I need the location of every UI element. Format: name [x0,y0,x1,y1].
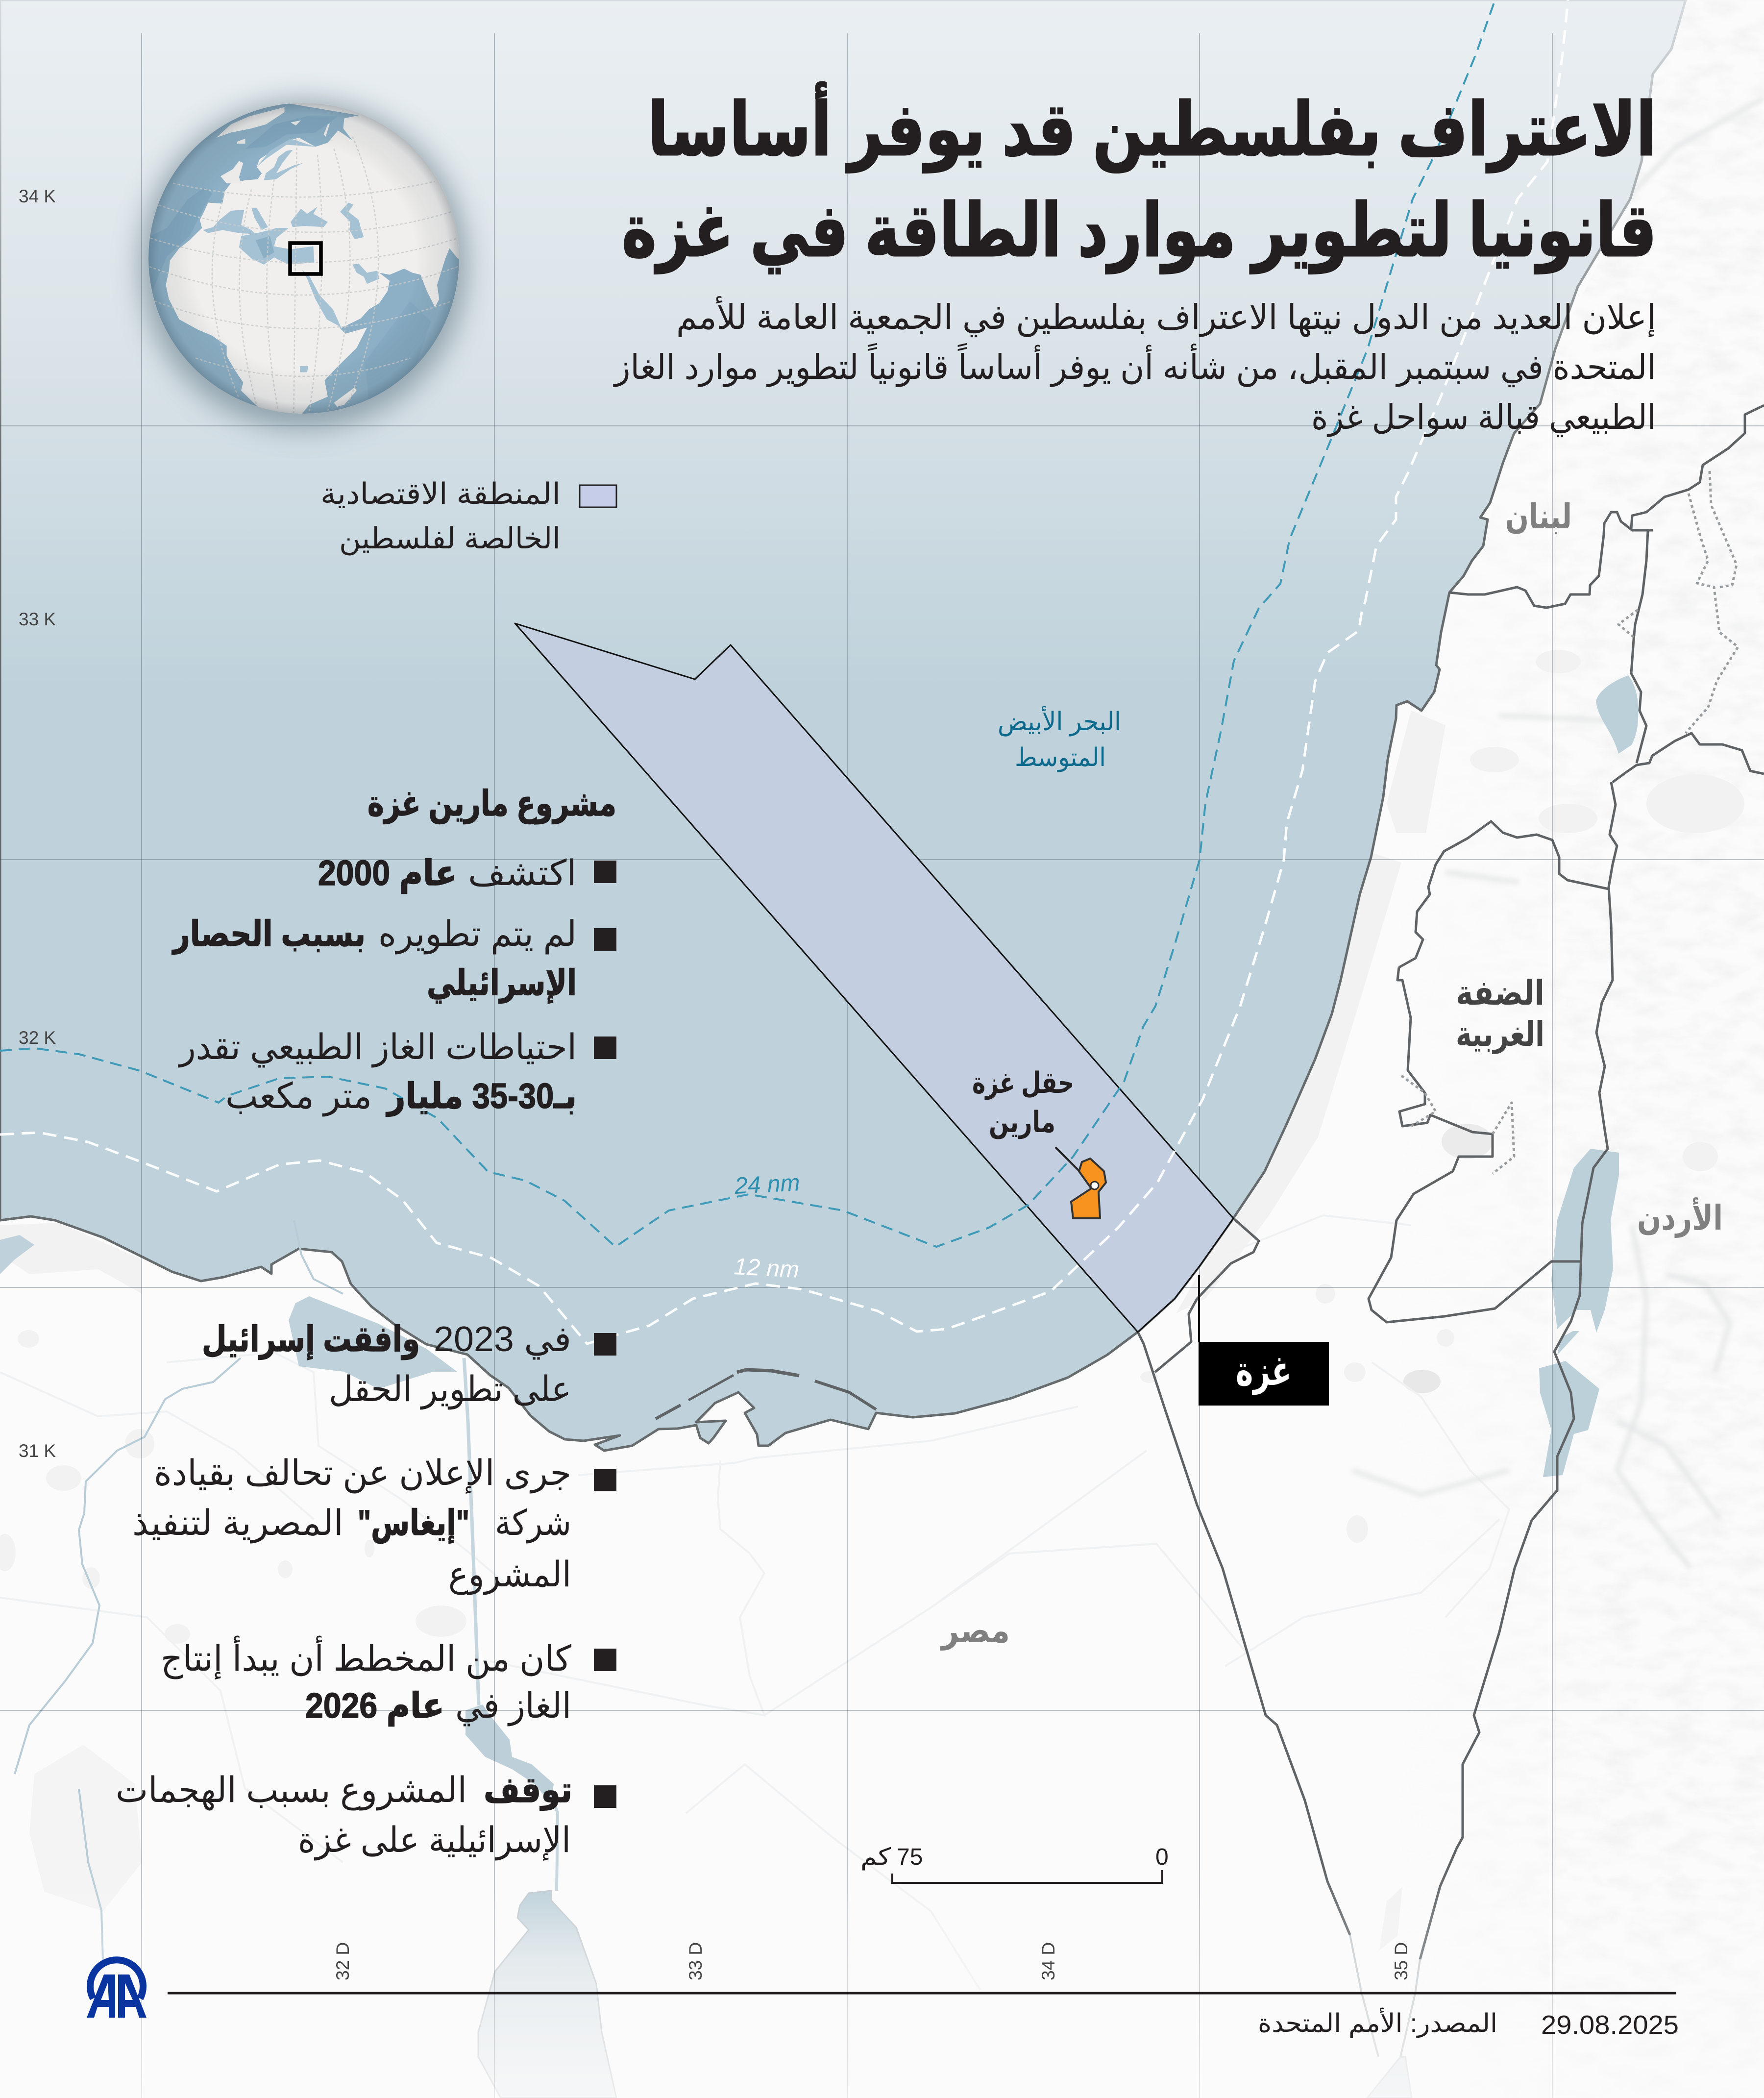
bullet: not developed: الإسرائيلي [427,963,577,1004]
bullet: not developed: لم يتم تطويره [378,914,577,955]
bullet: EGAS alliance: "إيغاس" [358,1504,469,1544]
bullet: EGAS alliance [132,1454,616,1595]
longitude labels [333,1942,1411,1980]
bullet: project halted: المشروع بسبب الهجمات [116,1771,467,1811]
legend: exclusive economic zone [320,477,616,556]
legend: exclusive economic zone: الخالصة لفلسطين [339,522,561,556]
intro text: المتحدة في سبتمبر المقبل، من شأنه أن يوفر أساساً قانونياً لتطوير موارد الغاز [613,343,1656,388]
bullet: EGAS alliance: جرى الإعلان عن تحالف بقيادة [154,1454,571,1494]
bullet: project halted: الإسرائيلية على غزة [298,1821,571,1861]
label: 24 nm: 24 nm [734,1170,801,1199]
callout: Gaza [1199,1275,1329,1406]
label: West Bank [1456,974,1544,1054]
latitude labels: 33 K [19,609,56,629]
borders [656,405,1764,2057]
bullet: reserves: احتياطات الغاز الطبيعي تقدر [178,1028,577,1068]
bullet: Israel approved: على تطوير الحقل [329,1370,571,1410]
longitude labels: 35 D [1391,1942,1411,1980]
bullet: reserves [178,1028,616,1117]
label: 12 nm: 12 nm [733,1254,800,1283]
longitude labels: 32 D [333,1942,353,1980]
bullet: production planned: كان من المخطط أن يبدأ إنتاج [161,1635,572,1679]
legend: exclusive economic zone: المنطقة الاقتصادية [320,477,561,510]
scale bar: 0 [1155,1844,1169,1870]
bullet: EGAS alliance: المشروع [448,1555,571,1595]
intro text [613,296,1656,438]
Suez canal and Bitter Lakes [466,1704,558,1891]
bullet: not developed [172,914,616,1004]
label: Gaza Marine field [972,1066,1074,1139]
latitude labels [19,186,56,1461]
bullet: production planned: الغاز في [455,1686,571,1727]
globe locator [140,96,472,429]
cities and lowlands [0,650,1744,1950]
label: Jordan: الأردن [1637,1197,1723,1238]
label: Gaza Marine field: حقل غزة [972,1066,1074,1100]
label: Lebanon: لبنان [1505,497,1572,536]
Gulf of Suez [478,1891,616,2098]
Nile delta lakes and rivers [0,1220,479,1960]
line: 12 nm limit [0,0,1568,1344]
Sea of Galilee [1596,675,1638,754]
bullet: production planned [161,1635,616,1727]
line: 24 nm limit [0,0,1495,1247]
latitude labels: 34 K [19,186,56,206]
hillshade ridges [1352,98,1764,1568]
bullet: Israel approved: وافقت إسرائيل [202,1320,420,1360]
roads and wadis [0,1215,1509,1990]
bullet: Israel approved [202,1320,616,1410]
scale bar [860,1844,1169,1883]
label: Mediterranean Sea: البحر الأبيض [998,706,1121,737]
bullet: reserves: بـ30-35 مليار [386,1077,577,1117]
intro text: الطبيعي قبالة سواحل غزة [1311,398,1656,438]
label: West Bank: الضفة [1456,974,1544,1012]
icon: Gaza Marine gas field [1055,1147,1106,1218]
bottom white fade [0,1862,1764,2098]
latitude labels: 31 K [19,1441,56,1461]
longitude labels: 34 D [1038,1942,1058,1980]
label: Egypt: مصر [940,1611,1010,1651]
sea [0,0,1686,1451]
source: المصدر: الأمم المتحدة [1258,2007,1497,2038]
terrain texture [1595,103,1744,1843]
bullet: project halted [116,1771,616,1861]
latitude labels: 32 K [19,1028,56,1048]
bullet: discovered [318,854,616,893]
intro text: إعلان العديد من الدول نيتها الاعتراف بفلسطين في الجمعية العامة للأمم [676,296,1656,338]
label: Mediterranean Sea [998,706,1121,772]
label: Gaza Marine field: مارين [989,1106,1055,1139]
longitude labels: 33 D [686,1942,706,1980]
bullet: not developed: بسبب الحصار [172,914,366,955]
bullet: reserves: متر مكعب [225,1077,372,1117]
footer rule [168,1992,1676,1995]
bullet: discovered: عام 2000 [318,854,457,893]
title [622,82,1657,274]
Gulf of Aqaba [1367,2057,1412,2098]
panel: Palestinian exclusive economic zone [515,623,1233,1332]
bullet: production planned: عام 2026 [305,1686,444,1726]
heading: Gaza Marine project: مشروع مارين غزة [368,784,616,824]
callout: Gaza: غزة [1236,1348,1292,1395]
date: 29.08.2025 [1541,2010,1679,2040]
bullet: discovered: اكتشف [468,854,577,893]
label: Mediterranean Sea: المتوسط [1015,743,1106,772]
scale bar: 75 [897,1844,923,1870]
bullet: project halted: توقف [484,1771,572,1811]
bullet: EGAS alliance: شركة [495,1504,571,1544]
bullet: Israel approved: في 2023 [434,1320,571,1360]
icon: Anadolu Agency logo [87,1960,147,2018]
Dead Sea [1539,1149,1619,1477]
bullet: EGAS alliance: المصرية لتنفيذ [132,1504,343,1544]
scale bar: كم [860,1844,891,1871]
label: West Bank: الغربية [1456,1015,1544,1054]
